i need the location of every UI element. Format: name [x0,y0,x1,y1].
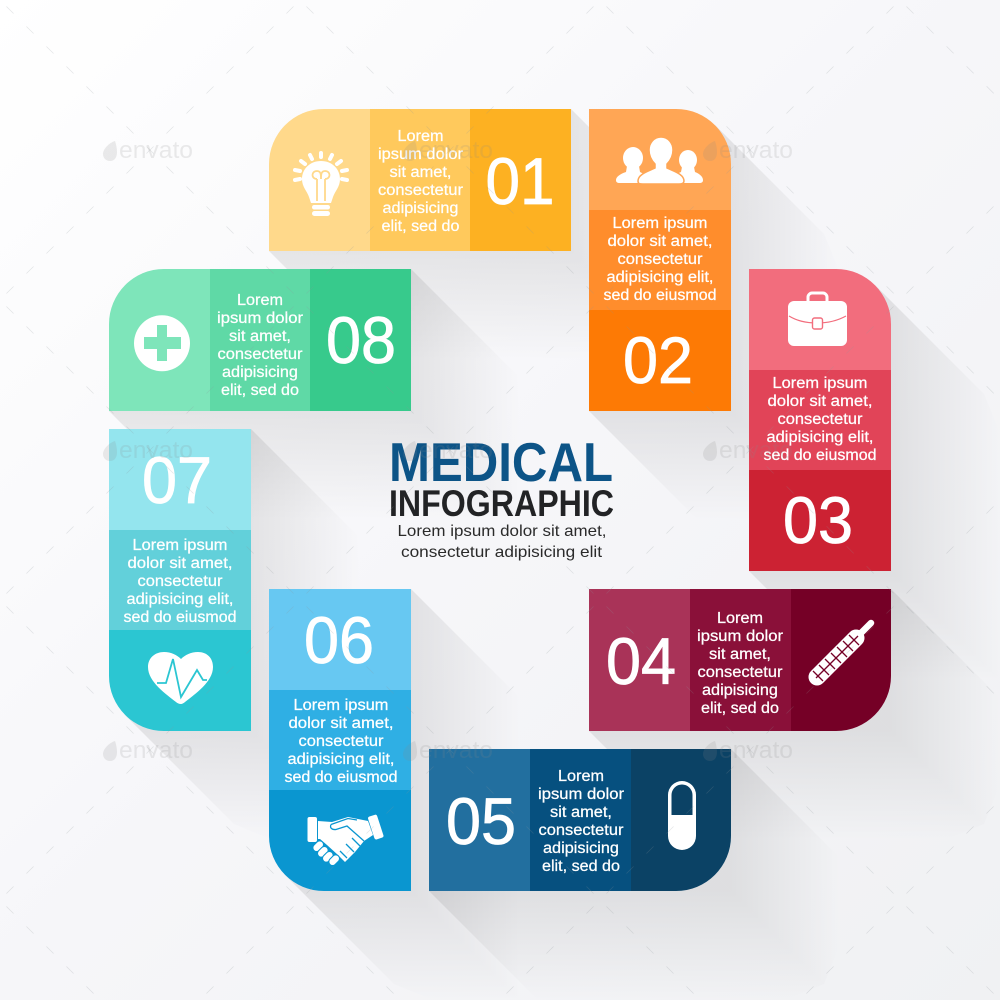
number 03: 03 [783,483,853,557]
description text: adipisicing elit, [126,591,234,608]
description text: Lorem ipsum [294,697,388,714]
number 04: 04 [606,624,676,698]
title: infographic: INFOGRAPHIC [389,483,614,524]
number 08: 08 [326,303,396,377]
description text: dolor sit amet, [768,393,872,410]
title: medical: MEDICAL [389,431,613,493]
panel: step 04 [589,589,891,731]
description text: sit amet, [229,328,291,345]
number 06: 06 [304,603,374,677]
description text: adipisicing [222,364,298,381]
description text: sed do eiusmod [284,769,398,786]
envato watermarks: envato [119,137,193,164]
description text: adipisicing [702,682,778,699]
description text: adipisicing elit, [766,429,874,446]
description text: consectetur [698,664,782,681]
description text: elit, sed do [542,858,620,875]
panel: step 01 [269,109,571,251]
description text: dolor sit amet, [128,555,232,572]
description text: Lorem [717,610,763,627]
center title block [389,431,614,561]
description text: sit amet, [550,804,612,821]
description text: consectetur [618,251,702,268]
description text: Lorem ipsum [612,215,708,232]
icon: pill capsule [668,781,696,850]
description text: ipsum dolor [538,786,624,803]
description text: dolor sit amet, [288,715,394,732]
description text [124,537,236,626]
panel: step 02 [589,109,731,411]
envato watermarks: envato [119,737,193,764]
description text: ipsum dolor [697,628,783,645]
envato watermarks: envato [419,137,493,164]
description text: dolor sit amet, [608,233,712,250]
description text [538,768,624,875]
envato watermarks: envato [119,437,193,464]
description text: elit, sed do [221,382,299,399]
envato watermarks: envato [719,737,793,764]
description text: Lorem [398,128,444,145]
panel: step 07 [109,429,251,731]
subtitle [398,523,606,561]
number 01: 01 [486,144,554,218]
description text: adipisicing [543,840,619,857]
description text: consectetur [218,346,302,363]
subtitle: consectetur adipisicing elit [401,544,603,561]
envato watermarks: envato [419,437,493,464]
envato watermarks [103,137,793,764]
description text: elit, sed do [382,218,460,235]
icon: medical cross [134,315,190,371]
number 07: 07 [142,443,212,517]
description text: ipsum dolor [378,146,463,163]
description text: sed do eiusmod [764,447,876,464]
description text [284,697,398,786]
description text: elit, sed do [701,700,779,717]
description text: sed do eiusmod [604,287,716,304]
icon: light bulb [295,153,347,216]
description text: adipisicing elit, [606,269,714,286]
description text: sit amet, [709,646,771,663]
description text: consectetur [138,573,222,590]
long diagonal card shadows [109,109,1000,1000]
description text: consectetur [538,822,624,839]
panel: step 03 [749,269,891,571]
description text: consectetur [298,733,384,750]
description text: sit amet, [390,164,452,181]
description text: adipisicing [382,200,458,217]
description text [217,292,303,399]
icon: thermometer [813,623,871,681]
envato watermarks: envato [719,437,793,464]
panel: step 06 [269,589,411,891]
description text: consectetur [378,182,463,199]
description text: Lorem [237,292,283,309]
panel: step 08 [109,269,411,411]
envato watermarks: envato [419,737,493,764]
icon: people group [616,137,703,184]
description text [378,128,463,235]
icon: heart with pulse [148,652,213,704]
description text [764,375,876,464]
subtitle: Lorem ipsum dolor sit amet, [398,523,606,540]
description text: ipsum dolor [217,310,303,327]
envato watermarks: envato [719,137,793,164]
description text: Lorem ipsum [132,537,228,554]
description text [697,610,783,717]
panel: step 05 [429,749,731,891]
description text [604,215,716,304]
icon: handshake [308,814,384,867]
description text: consectetur [778,411,862,428]
description text: Lorem ipsum [772,375,868,392]
description text: Lorem [558,768,604,785]
number 02: 02 [623,323,693,397]
icon: briefcase [788,293,847,346]
description text: adipisicing elit, [288,751,394,768]
description text: sed do eiusmod [124,609,236,626]
number 05: 05 [446,784,516,858]
